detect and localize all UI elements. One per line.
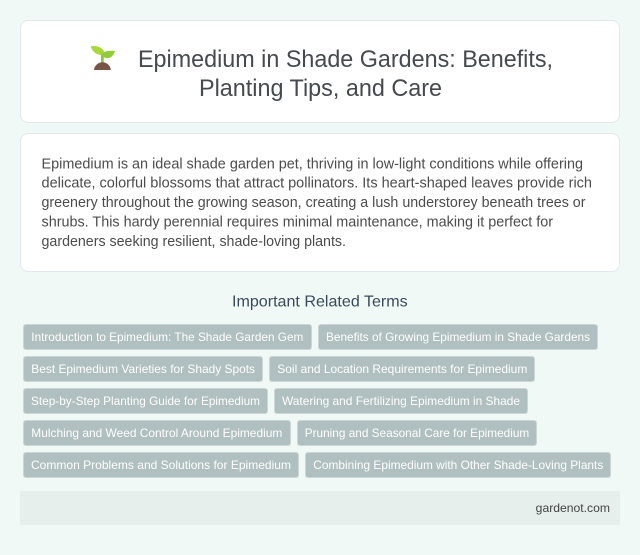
tag: soil and location: Soil and Location Requirements for Epimedium xyxy=(277,362,527,376)
tag: benefits: Benefits of Growing Epimedium in Shade Gardens xyxy=(326,330,590,344)
tag: mulching: Mulching and Weed Control Around Epimedium xyxy=(31,426,282,440)
tag: combining xyxy=(306,452,610,478)
tag: combining: Combining Epimedium with Other Shade-Loving Plants xyxy=(313,458,603,472)
title: Epimedium in Shade Gardens: Benefits, xyxy=(138,46,553,73)
tag: watering: Watering and Fertilizing Epimedium in Shade xyxy=(282,394,520,408)
description text: delicate, colorful blossoms that attract pollinators. Its heart-shaped leaves provide rich xyxy=(42,176,592,192)
panel: header card xyxy=(20,20,620,122)
tag: mulching xyxy=(24,420,290,446)
tag: soil and location xyxy=(270,356,534,382)
footer site name: gardenot.com xyxy=(536,501,610,515)
tag: pruning xyxy=(298,420,536,446)
description text: Epimedium is an ideal shade garden pet, thriving in low-light conditions while offering xyxy=(42,156,583,172)
tag: planting guide: Step-by-Step Planting Guide for Epimedium xyxy=(31,394,260,408)
tag list xyxy=(24,324,610,478)
heading: important related terms: Important Related Terms xyxy=(232,294,408,311)
title: Planting Tips, and Care xyxy=(199,75,442,102)
description text: gardeners seeking resilient, shade-loving plants. xyxy=(42,234,346,250)
tag: varieties xyxy=(24,356,262,382)
tag: benefits xyxy=(318,324,598,350)
footer xyxy=(20,491,620,525)
panel: description card xyxy=(20,134,620,272)
description text: greenery throughout the growing season, creating a lush understorey beneath trees or xyxy=(42,195,586,211)
tag: pruning: Pruning and Seasonal Care for Epimedium xyxy=(305,426,529,440)
tag: common problems xyxy=(24,452,298,478)
title xyxy=(138,46,553,102)
tag: watering xyxy=(274,388,528,414)
description text xyxy=(42,156,592,250)
icon: seedling xyxy=(91,46,115,70)
tag: planting guide xyxy=(24,388,268,414)
tag: varieties: Best Epimedium Varieties for Shady Spots xyxy=(31,362,255,376)
tag: introduction xyxy=(24,324,312,350)
description text: shrubs. This hardy perennial requires minimal maintenance, making it perfect for xyxy=(42,214,553,230)
tag: common problems: Common Problems and Solutions for Epimedium xyxy=(31,458,291,472)
tag: introduction: Introduction to Epimedium: The Shade Garden Gem xyxy=(31,330,303,344)
